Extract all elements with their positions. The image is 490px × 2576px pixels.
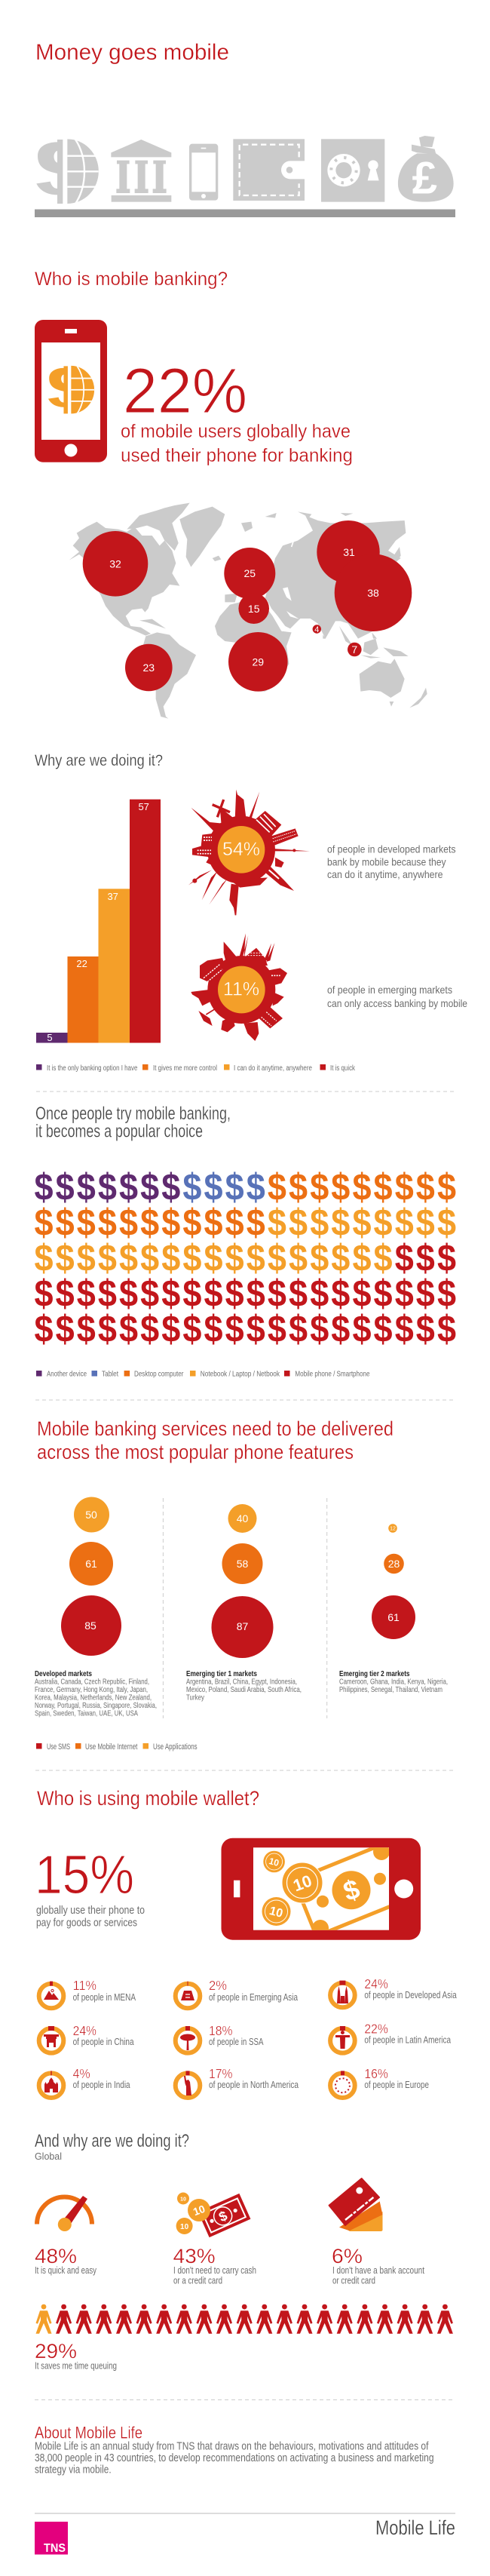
legend: reasons: It is quick [330, 1064, 356, 1073]
bubble chart: emerging tier 2: 61 [387, 1611, 400, 1623]
stat: 22 percent: 22% [123, 355, 247, 426]
skyline: developed markets 54 percent [188, 790, 310, 915]
icon: pound money bag: £ [412, 153, 437, 204]
icon: landscape phone with cash [222, 1838, 421, 1940]
icon: red phone with globe [35, 320, 107, 462]
logo: TNS: TNS [44, 2542, 66, 2555]
world map with bubbles [69, 503, 427, 719]
region stat: MENA [39, 1978, 136, 2008]
region stat: Emerging Asia: 2% [209, 1978, 227, 1993]
bubble chart: emerging tier 2: 12 [390, 1527, 396, 1531]
bubble values: 15 [248, 603, 260, 615]
market list: developed: Norway, Portugal, Russia, Singapore, Slovakia, [35, 1701, 157, 1710]
text: developed markets: bank by mobile because they [327, 855, 446, 867]
legend: phone features: Use Applications [153, 1742, 198, 1752]
market list: developed: France, Germany, Hong Kong, Italy, Japan, [35, 1685, 148, 1694]
icon: safe [321, 139, 384, 202]
pictogram: dollar signs by device: $$$$$$$$$$$$$$$$$ [34, 1238, 393, 1280]
market list: emerging tier 1 [186, 1669, 302, 1702]
region stat: Latin America [330, 2022, 451, 2053]
heading: mobile banking services: Mobile banking services need to be delivered [37, 1417, 394, 1440]
reason: quick and easy [35, 2196, 97, 2276]
heading: once people try mobile banking: it becomes a popular choice [35, 1122, 203, 1142]
title: Money goes mobile [35, 40, 229, 65]
market list: emerging tier 1: Emerging tier 1 markets [186, 1669, 257, 1678]
about mobile life [35, 2423, 434, 2476]
bubble chart: emerging tier 2 [372, 1524, 415, 1639]
legend: reasons [36, 1064, 356, 1073]
bubble chart: developed markets: 61 [85, 1558, 97, 1570]
icon: banknote and coins: $ [216, 2208, 230, 2224]
region stat: Latin America: 22% [364, 2022, 388, 2037]
legend: reasons: It is the only banking option I have [47, 1064, 138, 1073]
icon: landscape phone with cash: $ [339, 1873, 363, 1907]
bubble chart: emerging tier 1 [211, 1504, 273, 1658]
reason: saves time queuing [35, 2340, 117, 2372]
region stat: North America [176, 2066, 299, 2098]
legend: devices: Tablet [102, 1370, 118, 1379]
reason: quick and easy: 48% [35, 2245, 77, 2267]
market list: emerging tier 2: Emerging tier 2 markets [339, 1669, 410, 1678]
stat: 22 percent [121, 355, 353, 466]
legend: devices: Desktop computer [134, 1370, 184, 1379]
heading: mobile banking services: across the most popular phone features [37, 1441, 354, 1463]
region stat: Europe: 16% [364, 2066, 388, 2081]
footer label: Mobile Life: Mobile Life [375, 2516, 455, 2539]
skyline: emerging markets 11 percent [191, 933, 287, 1041]
pictogram: dollar signs by device: $$$$$$$$$$$$$$$$$$$$ [34, 1309, 456, 1351]
market list: emerging tier 1: Turkey [186, 1693, 205, 1702]
map: continents [69, 503, 427, 719]
region stat: China: of people in China [73, 2037, 134, 2047]
bubbles [83, 520, 412, 692]
region stat: SSA: of people in SSA [209, 2037, 264, 2047]
heading: who is mobile banking: Who is mobile banking? [35, 269, 228, 290]
region stat: Europe: of people in Europe [364, 2080, 429, 2090]
bar chart: reasons: 37 [107, 891, 118, 902]
bar chart: reasons: 5 [47, 1032, 53, 1043]
bubble values [109, 546, 379, 674]
reason: no bank account: or credit card [332, 2275, 375, 2286]
pictogram: dollar signs by device: $$$$ [182, 1167, 265, 1209]
bubble chart: developed markets: 85 [84, 1620, 96, 1632]
market list: emerging tier 2: Cameroon, Ghana, India, Kenya, Nigeria, [339, 1678, 448, 1687]
icon: landscape phone with cash: 10 [290, 1871, 314, 1895]
region stat: India: of people in India [73, 2080, 130, 2090]
icon: banknote and coins: 10 [180, 2223, 189, 2231]
region stat: Developed Asia: of people in Developed Asia [364, 1990, 457, 2000]
heading: and why are we doing it: And why are we doing it? [35, 2131, 189, 2151]
reason: no need to carry cash: I don't need to carry cash [173, 2265, 256, 2276]
region stat: SSA: 18% [209, 2023, 232, 2038]
reason: no need to carry cash: or a credit card [173, 2275, 222, 2286]
legend: devices: Another device [47, 1370, 87, 1379]
footer rule [35, 2513, 455, 2514]
reason: no bank account: I don't have a bank account [332, 2265, 424, 2276]
reason: saves time queuing: It saves me time queuing [35, 2361, 117, 2372]
bar chart: reasons: 57 [138, 801, 149, 812]
icon: speed gauge [37, 2196, 92, 2231]
icon: pound money bag [398, 136, 454, 204]
heading: and why are we doing it [35, 2131, 189, 2162]
bubble chart: emerging tier 2: 28 [388, 1558, 400, 1570]
about mobile life: strategy via mobile. [35, 2464, 112, 2476]
icon: banknote and coins: 10 [180, 2197, 186, 2203]
bubble chart: emerging tier 1: 87 [237, 1620, 248, 1632]
region stat: North America: 17% [209, 2066, 232, 2081]
text: developed markets: can do it anytime, anywhere [327, 868, 443, 880]
icon: bank [111, 140, 171, 202]
reason: no need to carry cash: 43% [173, 2245, 216, 2267]
region stat: MENA: 11% [73, 1978, 96, 1993]
region stat: India: 4% [73, 2066, 90, 2081]
reason: no bank account [329, 2178, 424, 2286]
legend: phone features: Use Mobile Internet [85, 1742, 137, 1752]
legend: reasons: I can do it anytime, anywhere [234, 1064, 312, 1073]
region stat: Europe [330, 2066, 429, 2098]
pictogram: dollar signs by device: $$$ [395, 1238, 456, 1280]
legend: phone features: Use SMS [47, 1742, 70, 1752]
bar chart: reasons: 22 [76, 958, 87, 969]
bubble values: 38 [367, 587, 379, 599]
heading: mobile banking services [37, 1417, 394, 1463]
region stat: Emerging Asia [176, 1978, 298, 2008]
text: emerging markets: of people in emerging markets [327, 984, 452, 996]
market list: developed: Australia, Canada, Czech Republic, Finland, [35, 1678, 149, 1687]
market list: developed: Developed markets [35, 1669, 92, 1678]
bubble values: 31 [343, 546, 355, 558]
market list: emerging tier 2: Philippines, Senegal, Thailand, Vietnam [339, 1685, 443, 1694]
reason: quick and easy: It is quick and easy [35, 2265, 97, 2276]
market list: developed: Korea, Malaysia, Netherlands, New Zealand, [35, 1693, 152, 1702]
legend: devices [36, 1370, 370, 1379]
bubble values: 32 [109, 558, 121, 570]
pictogram: dollar signs by device: $$$$$$$$$$$$$$$$$$$$ [34, 1273, 456, 1316]
heading: and why are we doing it: Global [35, 2151, 62, 2162]
market list: emerging tier 1: Mexico, Poland, Saudi Arabia, South Africa, [186, 1685, 302, 1694]
icon: wallet [233, 139, 305, 201]
region stat: North America: of people in North America [209, 2080, 299, 2090]
market list: emerging tier 1: Argentina, Brazil, China, Egypt, Indonesia, [186, 1678, 297, 1687]
legend: phone features [36, 1742, 198, 1752]
icon row: money and banking [35, 136, 455, 217]
icon: banknote and coins: 10 [191, 2203, 207, 2218]
region stat: China [39, 2023, 134, 2053]
bubble values: 23 [143, 662, 155, 674]
skyline: developed markets 54 percent: 54% [222, 839, 260, 860]
logo: TNS [35, 2522, 68, 2555]
icon: bank cards [329, 2178, 383, 2231]
region stat: Developed Asia: 24% [364, 1976, 388, 1991]
legend: devices: Mobile phone / Smartphone [295, 1370, 370, 1379]
pictogram: dollar signs by device: $$$$$$$$$ [268, 1167, 456, 1209]
market list: emerging tier 2 [339, 1669, 448, 1694]
pictogram: dollar signs by device: $$$$$$$$$ [268, 1202, 456, 1245]
heading: once people try mobile banking: Once people try mobile banking, [35, 1104, 231, 1124]
stat: 15 percent: pay for goods or services [36, 1917, 137, 1930]
stat: 15 percent: globally use their phone to [36, 1905, 145, 1917]
bubble chart: developed markets [61, 1497, 121, 1656]
bubble values: 4 [314, 625, 319, 634]
text: developed markets [327, 843, 455, 880]
text: developed markets: of people in developed markets [327, 843, 455, 855]
region stat: India [39, 2066, 130, 2098]
pictogram: dollar signs by device: $$$$$$$$$$$ [34, 1202, 265, 1245]
icon: landscape phone with cash: 10 [268, 1905, 284, 1920]
skyline: emerging markets 11 percent: 11% [223, 979, 259, 1000]
icon: dollar globe [36, 139, 99, 204]
icon: landscape phone with cash: 10 [268, 1856, 280, 1868]
reason: saves time queuing: 29% [35, 2340, 77, 2363]
region stat: Latin America: of people in Latin America [364, 2035, 451, 2046]
stat: 15 percent: 15% [35, 1845, 134, 1905]
reason: no bank account: 6% [332, 2245, 363, 2267]
pictogram: people row [36, 2304, 453, 2334]
text: emerging markets [327, 984, 467, 1009]
pictogram: dollar signs by device [34, 1167, 456, 1351]
market list: developed: Spain, Sweden, Taiwan, UAE, UK, USA [35, 1709, 138, 1718]
region stat: Developed Asia [330, 1976, 457, 2007]
shelf [35, 210, 455, 217]
icon: phone [189, 144, 218, 201]
heading: who is using mobile wallet: Who is using mobile wallet? [37, 1787, 259, 1810]
icon: banknote and coins [176, 2192, 250, 2237]
about mobile life: About Mobile Life [35, 2423, 142, 2442]
region stat: SSA [176, 2023, 264, 2053]
bubble chart: emerging tier 1: 40 [237, 1512, 248, 1524]
legend: devices: Notebook / Laptop / Netbook [201, 1370, 280, 1379]
stat: 22 percent: of mobile users globally have [121, 421, 351, 442]
region stat: MENA: of people in MENA [73, 1992, 136, 2003]
heading: why are we doing it: Why are we doing it? [35, 752, 163, 769]
region stat: Emerging Asia: of people in Emerging Asia [209, 1992, 298, 2003]
bubble values: 29 [253, 656, 264, 668]
market list: developed [35, 1669, 157, 1718]
pictogram: dollar signs by device: $$$$$$$ [34, 1167, 180, 1209]
bubble values: 25 [244, 567, 256, 579]
heading: once people try mobile banking [35, 1104, 231, 1142]
bubble values: 7 [351, 643, 357, 656]
reason: no need to carry cash [173, 2192, 256, 2286]
text: emerging markets: can only access banking by mobile [327, 997, 467, 1009]
bubble chart: developed markets: 50 [85, 1509, 97, 1521]
bar chart: reasons [36, 800, 161, 1043]
bubble chart: emerging tier 1: 58 [237, 1558, 248, 1570]
legend: reasons: It gives me more control [153, 1064, 217, 1073]
region stat: China: 24% [73, 2023, 96, 2038]
stat: 22 percent: used their phone for banking [121, 445, 353, 466]
